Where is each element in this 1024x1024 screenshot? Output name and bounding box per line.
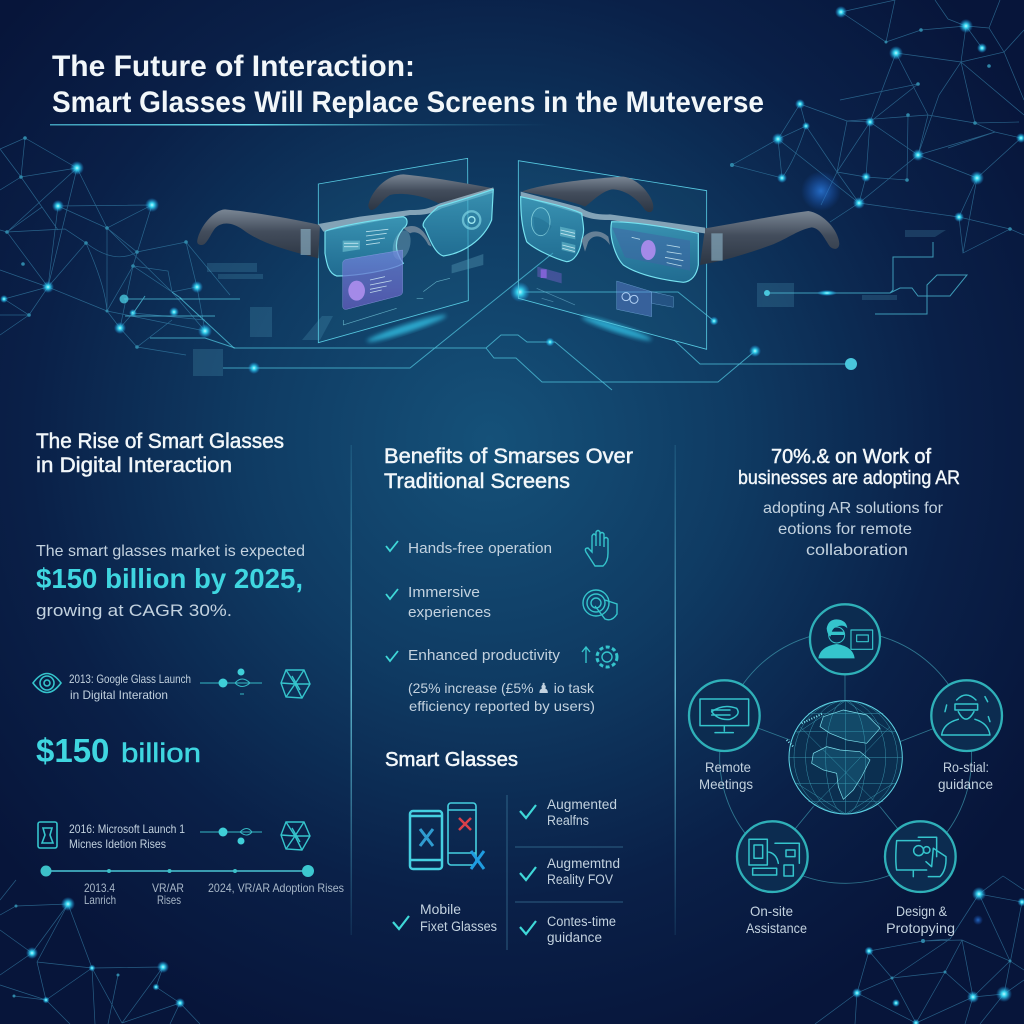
under-glow <box>366 312 448 345</box>
hero: right smart glasses and panel <box>518 161 839 349</box>
timeline axis: 2013.4 <box>84 881 115 895</box>
node: right, guidance <box>931 680 1002 751</box>
label: remote meetings: Remote <box>705 759 751 775</box>
icon: polygon mesh <box>281 822 310 850</box>
comparison list <box>393 797 620 945</box>
node: bottom right, design <box>885 821 956 892</box>
frame <box>521 192 705 233</box>
main temple <box>197 209 320 258</box>
market stat text: $150 billion by 2025, <box>36 563 303 594</box>
column 3 body: collaboration <box>806 542 908 559</box>
timeline axis <box>40 865 344 907</box>
icon: phones with x marks <box>410 803 484 869</box>
icon: touch rings <box>583 590 617 620</box>
node: left, remote meetings <box>689 680 760 751</box>
benefit: immersive: Immersive <box>408 585 480 601</box>
productivity note: efficiency reported by users) <box>409 698 595 714</box>
holographic panel <box>518 161 707 349</box>
network: top right <box>730 0 1024 253</box>
far temple <box>368 174 493 210</box>
timeline axis: VR/AR <box>152 881 184 895</box>
column 1 heading: The Rise of Smart Glasses <box>36 430 284 453</box>
timeline entry 2013 <box>33 668 310 702</box>
big figure: $150 <box>36 732 109 769</box>
comparison list: Realfns <box>547 813 589 828</box>
title: Smart Glasses Will Replace Screens in the Muteverse <box>52 86 764 119</box>
label: on-site assistance: On-site <box>750 903 793 919</box>
hero: circuit traces and squares <box>120 230 967 390</box>
label: remote meetings <box>699 759 753 792</box>
far temple <box>522 177 653 212</box>
productivity note: (25% increase (£5% ♟ io task <box>408 680 595 696</box>
productivity note <box>408 680 595 714</box>
benefit: immersive: experiences <box>408 605 491 621</box>
comparison list: Fixet Glasses <box>420 919 497 934</box>
comparison list: Augmemtnd <box>547 856 620 871</box>
big figure: billion <box>121 738 201 768</box>
icon: polygon mesh <box>281 670 310 698</box>
timeline axis: Rises <box>157 893 181 907</box>
column 3 body <box>763 500 944 559</box>
comparison list: Mobile <box>420 902 461 917</box>
comparison list: guidance <box>547 930 602 945</box>
column 3 heading: businesses are adopting AR <box>738 468 960 489</box>
market stat text <box>36 543 305 620</box>
icon: hand <box>585 530 608 566</box>
timeline entry 2013: in Digital Interation <box>70 688 168 702</box>
icon: eye <box>33 674 61 692</box>
timeline entry 2016 <box>38 822 310 851</box>
column 2 heading: Traditional Screens <box>384 470 570 493</box>
divider right <box>674 445 676 935</box>
frame <box>318 187 493 232</box>
market stat text: The smart glasses market is expected <box>36 543 305 560</box>
lens <box>521 197 584 262</box>
use case hub <box>689 604 1002 892</box>
ring and spokes <box>720 631 972 883</box>
benefit: productivity <box>386 647 617 667</box>
main temple <box>700 211 839 265</box>
timeline entry 2013: 2013: Google Glass Launch <box>69 672 191 686</box>
market stat text: growing at CAGR 30%. <box>36 601 232 620</box>
network: bottom right <box>815 876 1024 1024</box>
label: on-site assistance: Assistance <box>746 920 807 936</box>
purple card <box>343 250 403 309</box>
smart glasses subheading: Smart Glasses <box>385 749 518 771</box>
globe <box>787 701 902 814</box>
title <box>52 50 764 119</box>
sub-panels <box>537 267 562 283</box>
holographic panel <box>318 158 468 343</box>
benefit: hands-free: Hands-free operation <box>408 541 552 557</box>
hero: left smart glasses and panel <box>197 158 493 345</box>
column 3 body: eotions for remote <box>778 521 912 538</box>
comparison list: Reality FOV <box>547 872 613 887</box>
comparison list: Contes-time <box>547 914 616 929</box>
divider left <box>350 445 352 935</box>
benefit: immersive <box>386 585 617 621</box>
icon: arrow and gear <box>582 647 617 667</box>
title underline <box>50 124 550 126</box>
label: design and prototyping: Protopying <box>886 920 955 936</box>
column 2 heading <box>384 445 633 493</box>
title: The Future of Interaction: <box>52 50 415 83</box>
benefit: productivity: Enhanced productivity <box>408 648 561 664</box>
label: guidance <box>938 759 993 792</box>
comparison list: Augmented <box>547 797 617 812</box>
label: design and prototyping: Design & <box>896 903 948 919</box>
column 1 heading <box>36 430 284 477</box>
column 3 heading <box>738 446 960 489</box>
label: on-site assistance <box>746 903 807 936</box>
network: bottom left <box>0 880 200 1024</box>
label: design and prototyping <box>886 903 955 936</box>
timeline axis: Lanrich <box>84 893 116 907</box>
label: guidance: guidance <box>938 776 993 792</box>
network: left <box>0 136 230 355</box>
label: guidance: Ro-stial: <box>943 759 989 775</box>
column 1 heading: in Digital Interaction <box>36 454 232 477</box>
comparison divider <box>507 795 623 950</box>
icon: portrait <box>38 822 57 848</box>
label: remote meetings: Meetings <box>699 776 753 792</box>
node: top <box>810 604 880 674</box>
node: bottom left, on-site <box>737 821 808 892</box>
timeline entry 2016: Micnes Idetion Rises <box>69 837 166 851</box>
column 3 body: adopting AR solutions for <box>763 500 944 517</box>
benefit: hands-free <box>386 530 608 566</box>
under-glow <box>581 313 653 343</box>
column 2 heading: Benefits of Smarses Over <box>384 445 633 468</box>
big figure <box>36 732 201 769</box>
column 3 heading: 70%.& on Work of <box>771 446 931 468</box>
lens <box>325 217 407 276</box>
timeline entry 2016: 2016: Microsoft Launch 1 <box>69 822 185 836</box>
timeline axis: 2024, VR/AR Adoption Rises <box>208 881 344 895</box>
